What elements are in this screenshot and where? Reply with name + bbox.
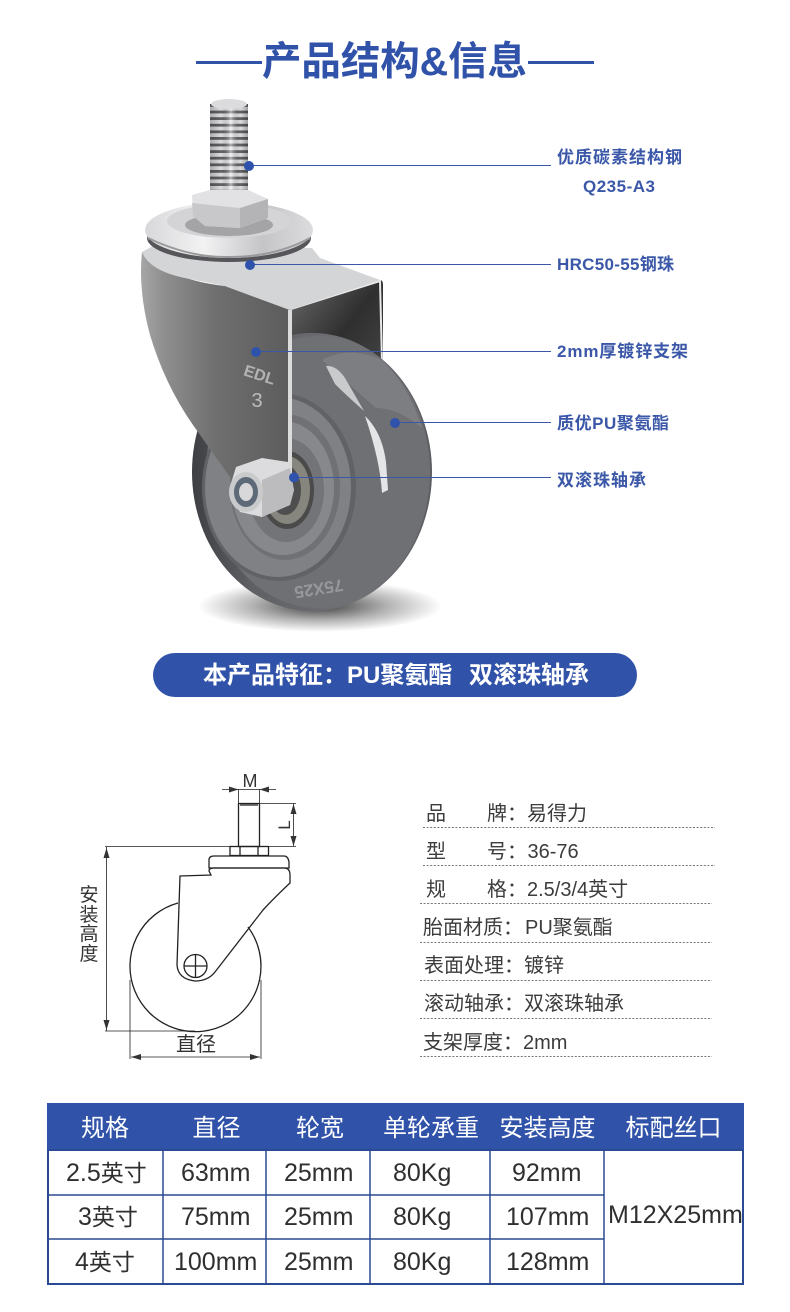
feature banner [153, 653, 637, 697]
table row 3英寸: 3英寸 [78, 1203, 138, 1231]
spec: bracket thickness: 支架厚度： [423, 1031, 523, 1054]
galvanized bracket side plate: 3 [251, 390, 263, 412]
caster line art [130, 804, 290, 1032]
lighter tread band [322, 352, 422, 428]
feature banner: 本产品特征： [203, 662, 347, 689]
spec: brand [423, 802, 715, 828]
table row 2.5英寸 [66, 1159, 581, 1187]
spec: size: 规 [426, 878, 446, 901]
bearing [260, 451, 314, 529]
tread highlights [326, 366, 364, 411]
dimension L [260, 804, 296, 846]
feature banner: PU聚氨酯 [347, 662, 452, 689]
table row 2.5英寸: 80Kg [393, 1159, 451, 1187]
spec: size: 格： [487, 878, 527, 901]
galvanized bracket side plate [141, 252, 290, 488]
spec: bearing [420, 992, 712, 1018]
table header: 直径 [192, 1115, 240, 1142]
table row 4英寸: 128mm [506, 1248, 589, 1276]
table grid [48, 1150, 743, 1284]
table header: 规格 [81, 1115, 129, 1142]
spec: tread material: PU聚氨酯 [525, 916, 613, 939]
table row 2.5英寸: 63mm [181, 1159, 250, 1187]
table header: 安装高度 [500, 1115, 596, 1142]
size table [47, 1103, 744, 1284]
table row 2.5英寸: 25mm [284, 1159, 353, 1187]
table row 2.5英寸: 2.5英寸 [66, 1159, 147, 1187]
spec: bracket thickness [420, 1031, 712, 1056]
title: 产品结构&信息 [262, 40, 527, 84]
axle nut [229, 458, 294, 517]
table header [47, 1103, 744, 1150]
callout: 优质碳素结构钢 [244, 147, 682, 196]
spec: size: 2.5/3/4英寸 [527, 878, 628, 901]
spec: surface: 镀锌 [524, 954, 564, 977]
dimension: diameter: 直径 [176, 1033, 216, 1056]
logo: EDL [242, 363, 277, 389]
dimension: diameter [130, 980, 261, 1060]
dimension drawing [79, 771, 296, 1060]
tyre marking: 75X25 [293, 575, 345, 602]
spec: brand: 牌： [487, 802, 527, 825]
spec list [420, 802, 715, 1056]
dimension: installed height: 度 [79, 943, 99, 965]
callout: HRC50-55钢珠 [245, 255, 674, 274]
callout: 双滚珠轴承: 双滚珠轴承 [557, 470, 646, 490]
merged thread cell: M12X25mm [608, 1201, 743, 1229]
callout: 2mm厚镀锌支架: 2mm厚镀锌支架 [557, 341, 688, 361]
wheel [192, 333, 432, 611]
callout: 优质碳素结构钢: 优质碳素结构钢 [557, 147, 682, 167]
dimension L: L [275, 820, 294, 830]
hex nut on stem [192, 190, 268, 228]
washer [145, 202, 313, 262]
table header: 轮宽 [296, 1115, 344, 1142]
spec: brand: 品 [426, 803, 446, 825]
product photo: swivel caster [141, 99, 442, 632]
dimension: installed height: 装 [79, 904, 99, 926]
spec: tread material [420, 916, 712, 942]
dimension: installed height [79, 846, 296, 1031]
table header: 单轮承重 [383, 1115, 479, 1142]
table row 3英寸 [78, 1203, 589, 1231]
spec: surface: 表面处理： [424, 954, 524, 977]
spec: tread material: 胎面材质： [423, 916, 523, 939]
table row 3英寸: 107mm [506, 1203, 589, 1231]
threaded bolt [210, 99, 248, 194]
spec: bearing: 双滚珠轴承 [524, 992, 624, 1015]
callout: 质优PU聚氨酯: 质优PU聚氨酯 [557, 413, 669, 433]
dimension: installed height: 高 [79, 923, 99, 945]
spec: brand: 易得力 [527, 802, 587, 825]
callout: 优质碳素结构钢: Q235-A3 [583, 177, 655, 196]
callout: 2mm厚镀锌支架 [251, 341, 688, 361]
table row 3英寸: 80Kg [393, 1203, 451, 1231]
dimension M [222, 771, 276, 803]
title [196, 40, 594, 84]
spec: model: 型 [426, 840, 446, 863]
ground shadow [198, 580, 442, 632]
callout: HRC50-55钢珠: HRC50-55钢珠 [557, 255, 674, 274]
feature banner: 双滚珠轴承 [469, 662, 589, 689]
table row 2.5英寸: 92mm [512, 1159, 581, 1187]
callout: 双滚珠轴承 [289, 470, 646, 490]
table row 4英寸: 80Kg [393, 1248, 451, 1276]
table row 4英寸: 4英寸 [75, 1248, 135, 1276]
spec: surface [420, 954, 712, 980]
dimension M: M [242, 771, 258, 791]
spec: model: 号： [487, 841, 527, 863]
table row 4英寸 [75, 1248, 589, 1276]
spec: model: 36-76 [528, 841, 579, 863]
table header: 标配丝口 [626, 1115, 722, 1142]
table row 3英寸: 75mm [181, 1203, 250, 1231]
table row 3英寸: 25mm [284, 1203, 353, 1231]
spec: bearing: 滚动轴承： [424, 992, 524, 1015]
bracket shoulder [142, 242, 380, 310]
spec: bracket thickness: 2mm [523, 1032, 567, 1054]
table row 4英寸: 25mm [284, 1248, 353, 1276]
callout: 质优PU聚氨酯 [390, 413, 669, 433]
dimension: installed height: 安 [79, 884, 99, 906]
spec: size [420, 878, 712, 904]
bracket open box end [290, 280, 383, 400]
table row 4英寸: 100mm [174, 1248, 257, 1276]
spec: model [423, 840, 715, 866]
